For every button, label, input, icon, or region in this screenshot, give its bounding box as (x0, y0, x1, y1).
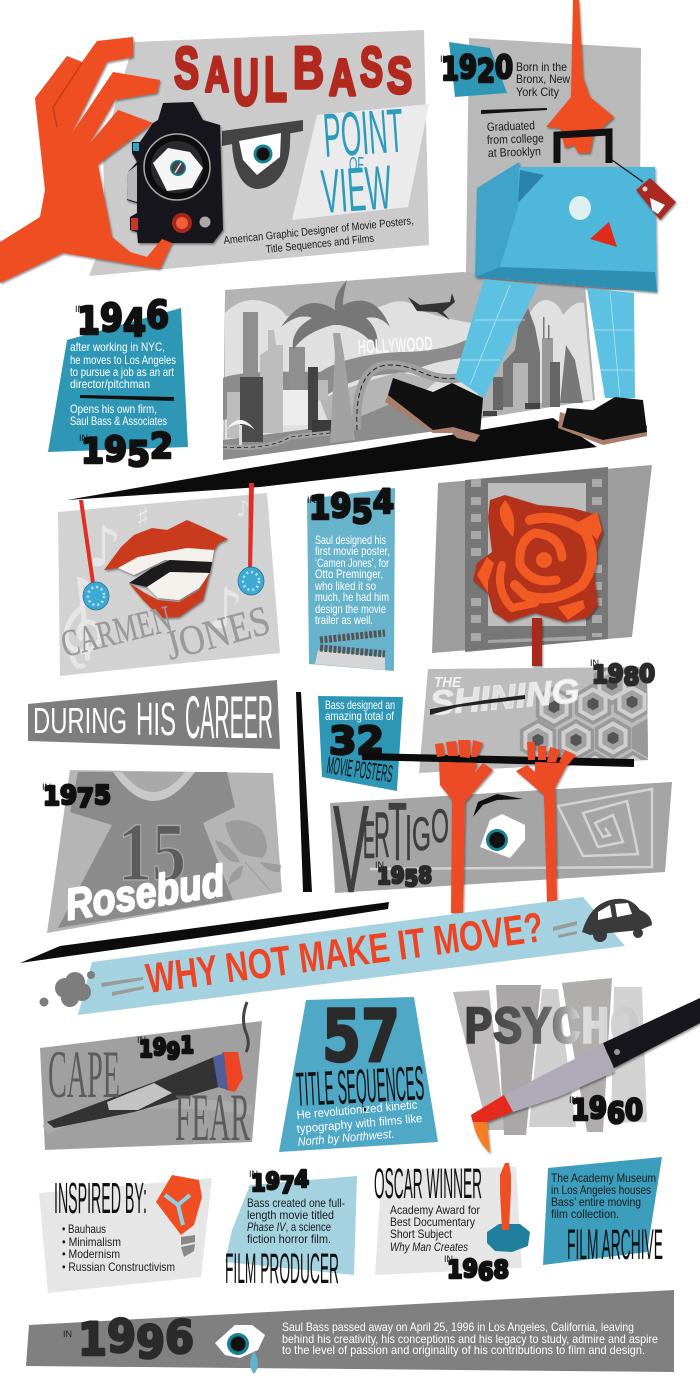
year: 1960: 6 (607, 1096, 625, 1130)
year: 1996: 6 (165, 1311, 194, 1364)
text: The Shining: THE (434, 674, 462, 691)
icon: rose silhouette (215, 820, 281, 890)
title: Saul Bass: U (233, 45, 259, 119)
text: FILM PRODUCER (225, 1245, 339, 1293)
text: behind his creativity, his conceptions and his legacy to study, admire and aspire (282, 1332, 658, 1346)
bar held by hands (362, 753, 634, 767)
text: amazing total of (325, 709, 395, 723)
panel: Cape Fear (40, 1002, 262, 1155)
year: 1920: 9 (459, 48, 477, 86)
year: 1946: IN (75, 304, 84, 314)
title: Saul Bass (174, 35, 412, 119)
icon: statuette (487, 1163, 530, 1252)
panel: Cape Fear: FEAR (175, 1079, 250, 1155)
year: 1980: 0 (639, 659, 655, 688)
icon: camera (127, 102, 223, 243)
icon: crying eye (215, 1325, 265, 1374)
year: 1975: 1 (43, 782, 60, 812)
panel: Rosebud (42, 770, 282, 933)
text: Best Documentary (390, 1215, 475, 1229)
text: Cape Fear (48, 1036, 250, 1155)
text: typography with films like (296, 1111, 423, 1136)
music notes (66, 497, 250, 666)
panel: 1954 (307, 482, 395, 671)
icon: rose (473, 495, 603, 666)
heading: during his career (28, 680, 280, 751)
year: 1980: 9 (608, 659, 624, 688)
music notes: ♪ (236, 497, 250, 522)
text (296, 1097, 423, 1149)
year: 1975: 7 (77, 784, 94, 814)
title: Vertigo: E (363, 811, 375, 870)
text: design the movie (315, 602, 386, 616)
year: 1920: 0 (495, 48, 513, 86)
panel: Vertigo: O (431, 799, 449, 852)
title: Vertigo: G (412, 807, 431, 860)
text (70, 340, 176, 391)
year: 1920: IN (440, 54, 449, 64)
text (70, 402, 167, 428)
panel: title (89, 30, 429, 276)
year: 1954: 1 (309, 488, 330, 527)
list: • Minimalism (62, 1235, 121, 1249)
icon: left earring (79, 500, 109, 610)
list: • Modernism (62, 1247, 120, 1261)
text: born: Born in the (516, 60, 567, 74)
text (314, 533, 390, 627)
heading: WHY NOT MAKE IT MOVE? (143, 903, 546, 1002)
year: 1958: 1 (377, 865, 391, 890)
text: CAREER (185, 684, 273, 751)
title: Saul Bass: S (360, 35, 383, 98)
year: 1954 (307, 482, 394, 531)
panel: point of view: POINT (321, 97, 406, 171)
icon: bulb (156, 1175, 202, 1257)
panel: 1920 blue tag (449, 42, 507, 97)
icon: legs and shoes (385, 279, 647, 445)
text: Why Man Creates (390, 1240, 468, 1254)
panel: point of view: OF (349, 154, 364, 176)
text: film collection. (551, 1207, 619, 1221)
year: 1946 (75, 293, 169, 345)
text: Bass created one full- (247, 1196, 345, 1210)
title: Psycho: PSYCHO (464, 999, 639, 1060)
title: Saul Bass: A (205, 48, 229, 102)
panel: 1996 (26, 1290, 674, 1374)
buildings left (227, 312, 332, 442)
year: 1952: 9 (104, 430, 127, 470)
text: after working in NYC, (70, 340, 165, 354)
year: 1946: 4 (123, 301, 146, 345)
shirt number 15: 15 (118, 806, 186, 899)
hexagon pattern (520, 667, 648, 760)
icon: arms hanging on bar (435, 740, 576, 913)
text: The Academy Museum (551, 1171, 656, 1185)
icon: clapperboard (315, 633, 385, 670)
text: first movie poster, (315, 544, 390, 558)
year: 1974 (249, 1167, 309, 1199)
text: length movie titled (247, 1208, 334, 1222)
year: 1958 (375, 860, 432, 892)
icon: Hollywood sign: HOLLYWOOD (357, 333, 433, 359)
divider: vertical bar (296, 692, 312, 892)
year: 1920: 1 (441, 50, 459, 88)
year: 1968: IN (444, 1254, 453, 1264)
year: 1920 (440, 48, 513, 90)
icon: slash under the feet (67, 418, 597, 500)
text: Saul Bass & Associates (70, 414, 167, 428)
text: to pursue a job as an art (70, 365, 175, 379)
text: graduated (487, 118, 544, 160)
text (551, 1171, 656, 1221)
year: 1996 (63, 1310, 194, 1369)
list (62, 1222, 175, 1274)
text (247, 1196, 345, 1246)
year: 1968: 8 (494, 1255, 509, 1284)
year: 1975: IN (42, 782, 51, 792)
arm holding bag (546, 0, 614, 153)
year: 1968: 6 (478, 1257, 494, 1286)
year: 1954: 5 (352, 492, 373, 531)
year: 1958: IN (375, 860, 384, 870)
sky clouds (225, 300, 593, 440)
text: graduated: from college (487, 131, 544, 147)
heading: during his career: HIS (136, 693, 176, 745)
year: 1960: 9 (589, 1091, 607, 1125)
year: 1952: 2 (150, 427, 173, 467)
panel: Hollywood skyline (223, 272, 595, 460)
year: 1952: 5 (127, 435, 150, 475)
icon: eye with brow (473, 794, 525, 858)
year: 1980: IN (590, 658, 599, 668)
year: 1996: 9 (136, 1316, 165, 1369)
icon: cigarette (47, 1052, 243, 1128)
year: 1952 (79, 427, 173, 475)
text: to the level of passion and originality of his contributions to film and design. (282, 1343, 645, 1357)
icon: exhaust smoke (40, 971, 95, 1007)
text (282, 1320, 658, 1357)
text: Cape Fear: CAPE (48, 1036, 120, 1112)
panel: 1920 background (440, 38, 655, 290)
music notes: ♪ (86, 515, 122, 580)
year: 1960: 1 (571, 1093, 589, 1127)
year: 1975: 9 (60, 781, 77, 811)
year: 1960 (569, 1091, 643, 1130)
year: 1968: 1 (447, 1255, 462, 1284)
text: The Shining: SHINING (428, 672, 581, 723)
year: 1974: 4 (294, 1167, 309, 1193)
text: in Los Angeles houses (551, 1183, 651, 1197)
text: He revolutionized kinetic (296, 1097, 418, 1122)
film perforations (471, 479, 602, 641)
year: 1974: 9 (266, 1169, 280, 1195)
panel: Psycho (453, 978, 700, 1153)
text: graduated: at Brooklyn (488, 144, 541, 160)
text: Phase IV, a science (247, 1220, 331, 1234)
year: 1960: IN (569, 1095, 578, 1105)
icon: bag with face (475, 0, 676, 292)
panel: 32 movie posters: Bass designed an (325, 698, 395, 712)
panel: film strip with rose (432, 465, 652, 666)
panel: film archive (543, 1157, 663, 1269)
text: trailer as well. (315, 613, 373, 627)
year: 1980: 8 (624, 662, 639, 691)
panel: oscar winner (374, 1160, 530, 1286)
panel: 1946 blue (48, 293, 188, 475)
title: Saul Bass: S (174, 36, 199, 101)
heading: during his career: DURING (33, 700, 127, 741)
divider slash (20, 902, 389, 963)
text: North by Northwest. (297, 1127, 395, 1149)
year: 1980 (590, 658, 655, 691)
panel: inspired by: INSPIRED BY: (54, 1174, 147, 1223)
music notes: ♪ (208, 577, 244, 642)
text: Carmen Jones: JONES (161, 598, 275, 670)
title: Vertigo: T (388, 785, 407, 878)
panel: The Shining (419, 660, 656, 773)
year: 1991 (137, 1033, 194, 1065)
text: who liked it so (314, 579, 376, 593)
year: 1954: IN (307, 495, 316, 505)
icon: palm tree (281, 280, 390, 443)
year: 1960: 0 (625, 1093, 643, 1127)
text: Otto Preminger, (315, 567, 383, 581)
text: much, he had him (315, 590, 389, 604)
title: Saul Bass: S (387, 47, 412, 104)
text: born (516, 60, 570, 99)
year: 1974: 7 (280, 1173, 294, 1199)
caption: Title Sequences and Films (265, 233, 375, 256)
text: Short Subject (390, 1227, 453, 1241)
text: fiction horror film. (247, 1232, 331, 1246)
music notes: ♯ (136, 501, 150, 534)
text: Bass’ entire moving (551, 1195, 641, 1209)
text: Carmen Jones (57, 598, 275, 670)
text: graduated: Graduated (487, 118, 535, 134)
year: 1991: 9 (153, 1035, 166, 1061)
year: 1991: 9 (166, 1039, 180, 1065)
year: 1975 (42, 781, 111, 814)
banner: why not make it move (78, 897, 625, 1015)
title: Vertigo: R (374, 798, 390, 871)
year: 1968: 9 (462, 1254, 478, 1283)
year: 1946: 9 (100, 296, 123, 340)
icon: orange hand (0, 37, 172, 283)
year: 1991: IN (137, 1035, 146, 1045)
year: 1958: 9 (391, 864, 404, 889)
list: • Russian Constructivism (62, 1260, 175, 1274)
panel: Vertigo (330, 781, 672, 919)
year: 1946: 6 (146, 293, 169, 337)
year: 1996: 9 (107, 1310, 136, 1363)
text: ‘Camen Jones’, for (315, 556, 389, 570)
title: Saul Bass: L (264, 45, 287, 115)
year: 1920: 2 (477, 52, 495, 90)
panel: 57 title sequences (279, 994, 438, 1152)
panel: Carmen Jones (57, 483, 280, 676)
title: Vertigo: I (405, 801, 412, 874)
year: 1980: 1 (592, 660, 608, 689)
list: • Bauhaus (62, 1222, 106, 1236)
year: 1974: 1 (251, 1171, 266, 1197)
year: 1946: 1 (77, 299, 100, 343)
text: MOVIE POSTERS (325, 752, 394, 788)
bag tag (636, 178, 676, 220)
icon: shirt (58, 772, 235, 928)
icon: knife (471, 998, 700, 1153)
icon: smoke (244, 1002, 248, 1052)
right shoe (558, 397, 647, 445)
text: Rosebud: Rosebud (62, 856, 229, 930)
year: 1975: 5 (94, 781, 111, 811)
year: 1996: IN (63, 1329, 72, 1339)
title: Saul Bass: B (293, 35, 324, 101)
text: born: York City (516, 85, 559, 99)
year: 1954: 9 (330, 486, 352, 525)
text: he moves to Los Angeles (70, 353, 176, 367)
icon: car (582, 899, 652, 942)
left shoe (385, 378, 483, 442)
year: 1954: 4 (373, 482, 394, 521)
panel: 32 movie posters (318, 696, 403, 791)
title: Saul Bass: A (329, 49, 356, 106)
text: director/pitchman (70, 377, 150, 391)
icon: right earring (238, 483, 264, 595)
panel: film producer (225, 1167, 357, 1293)
text: Carmen Jones: CARMEN (57, 598, 176, 666)
year: 1952: IN (79, 433, 88, 443)
year: 1991: 1 (139, 1037, 153, 1063)
year: 1996: 1 (78, 1313, 107, 1366)
icon: plane (408, 293, 455, 320)
panel: point of view: VIEW (319, 153, 394, 227)
icon: road (223, 365, 460, 448)
caption (223, 215, 414, 256)
year: 1958: 5 (404, 867, 418, 892)
icon: spiral (370, 789, 652, 869)
text: Opens his own firm, (70, 402, 157, 416)
panel: point of view (292, 97, 429, 227)
icon: small palm (226, 420, 255, 450)
text: Academy Award for (390, 1203, 480, 1217)
icon: glasses with eye (222, 120, 303, 189)
year: 1952: 1 (81, 432, 104, 472)
text: born: Bronx, New (516, 72, 570, 86)
year: 1968 (444, 1254, 509, 1286)
icon: lips (104, 520, 228, 618)
text (390, 1203, 480, 1254)
text: Saul designed his (315, 533, 386, 547)
year: 1958: 8 (418, 864, 432, 889)
number 32: 32 (329, 719, 384, 763)
year: 1974: IN (249, 1169, 258, 1179)
buildings right (483, 308, 583, 416)
panel: inspired by (39, 1174, 212, 1293)
year: 1991: 1 (180, 1033, 194, 1059)
number 57: 57 (322, 994, 400, 1078)
title: Vertigo: V (333, 781, 369, 919)
text: Saul Bass passed away on April 25, 1996 in Los Angeles, California, leaving (282, 1320, 634, 1334)
caption: American Graphic Designer of Movie Posters, (223, 215, 414, 247)
